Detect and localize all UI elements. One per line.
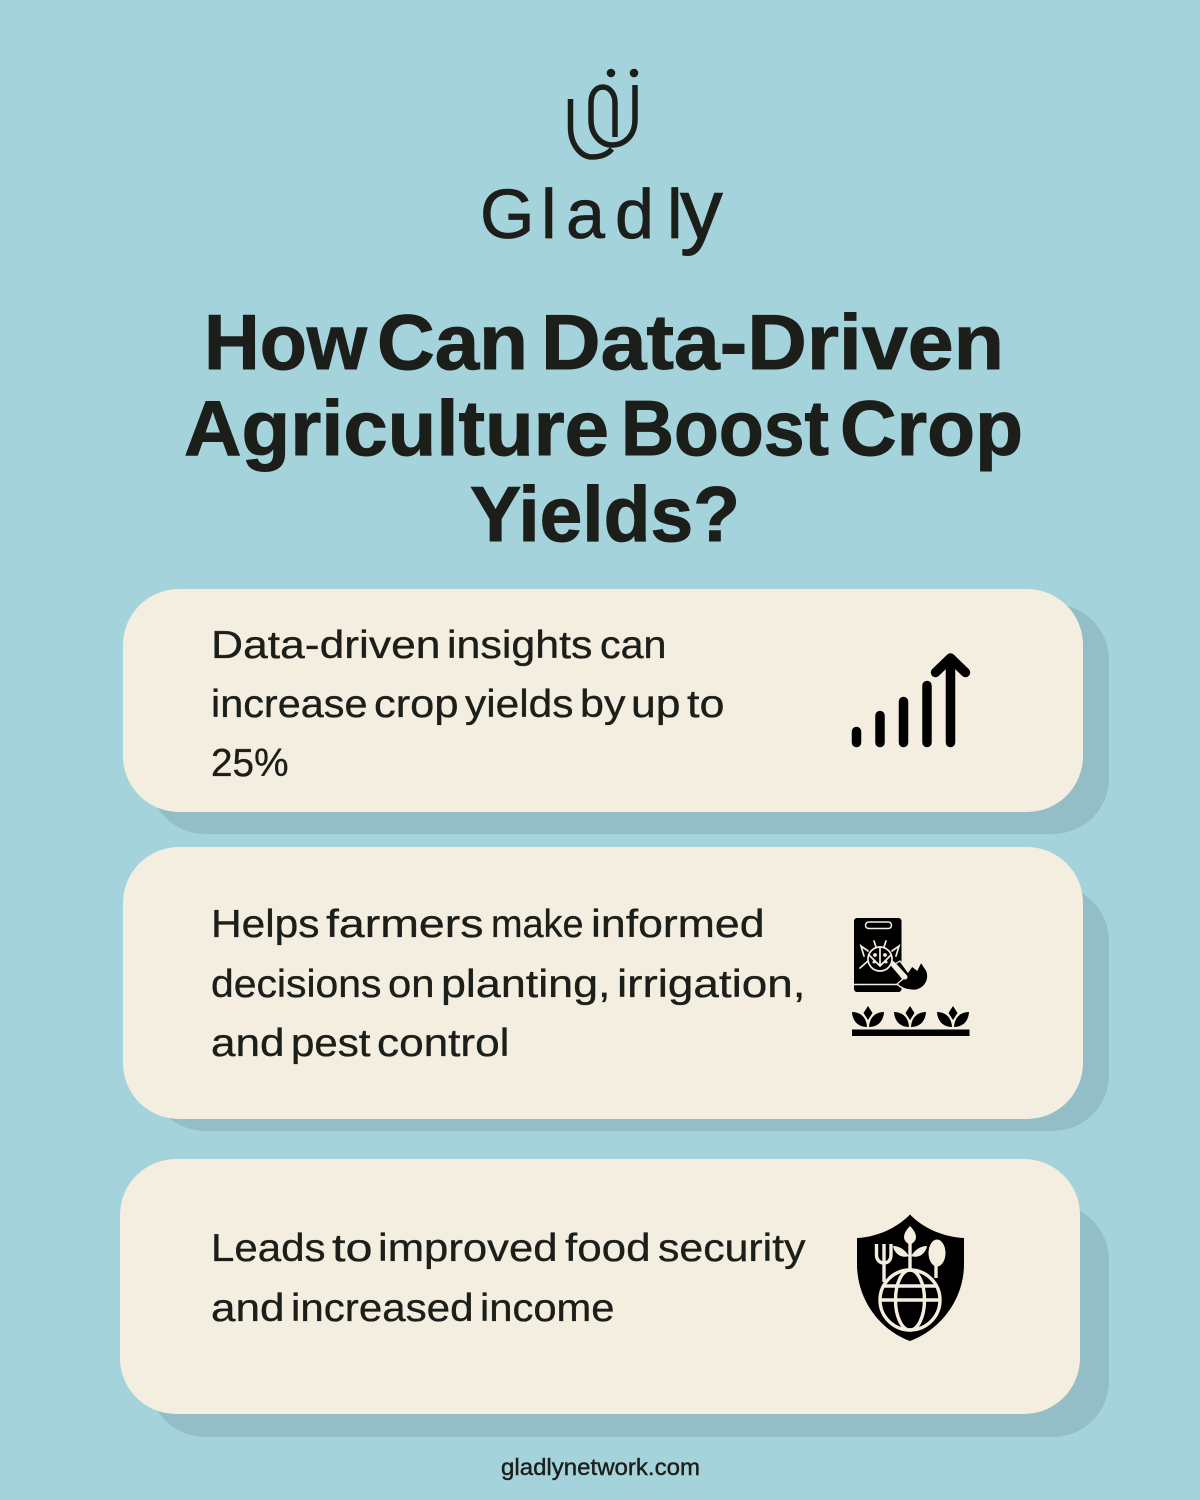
footer website: gladlynetwork.com [501,1454,700,1480]
icon: shield with globe, fork, spoon and sprout [857,1214,964,1341]
title: Can [377,298,528,386]
text block [211,1227,806,1330]
text block: pest [291,1022,371,1065]
title: How [204,298,367,386]
text block: increase [211,683,368,726]
text block: Helps [211,903,320,946]
text block: on [388,963,434,1006]
text block: up [631,683,680,726]
text block: irrigation, [617,963,806,1006]
panel card [123,589,1083,812]
logo wordmark [480,162,723,256]
text block: planting, [441,963,610,1006]
panel card [123,847,1083,1119]
title: Yields? [470,470,740,558]
text block: income [480,1287,614,1330]
logo wordmark: Gladl [480,175,683,253]
text block: Data-driven [211,624,440,667]
title: Boost [621,384,829,472]
title: Data-Driven [541,298,1004,386]
text block: yields [465,683,574,726]
title: Agriculture [184,384,609,472]
text block: increased [291,1287,474,1330]
text block: and [211,1022,284,1065]
panel: informed decisions [123,847,1109,1131]
text block: improved [378,1227,558,1270]
icon: phone pest scan over crops [852,918,970,1036]
title: Crop [840,384,1023,472]
icon: rising bars with arrow [856,658,966,742]
panel card [120,1159,1080,1414]
text block: can [600,624,666,667]
panel: food security [120,1159,1109,1437]
text block: food [565,1227,650,1270]
text block: to [687,683,724,726]
text block [211,624,724,785]
text block: security [658,1227,806,1270]
text block: by [580,683,626,726]
text block: 25% [211,742,288,785]
text block: and [211,1287,284,1330]
title [184,298,1023,558]
text block: to [332,1227,372,1270]
panel shadow [149,1204,1109,1437]
text block [211,903,806,1065]
panel: yield insight [123,589,1109,834]
text block: control [377,1022,510,1065]
text block: decisions [211,963,382,1006]
text block: farmers [326,903,484,946]
text block: insights [447,624,592,667]
text block: Leads [211,1227,326,1270]
text block: make [491,903,584,946]
logo mark [570,69,638,157]
logo wordmark: y [680,162,723,256]
panel shadow [149,885,1109,1131]
text block: crop [374,683,458,726]
text block: informed [591,903,764,946]
panel shadow [149,604,1109,834]
